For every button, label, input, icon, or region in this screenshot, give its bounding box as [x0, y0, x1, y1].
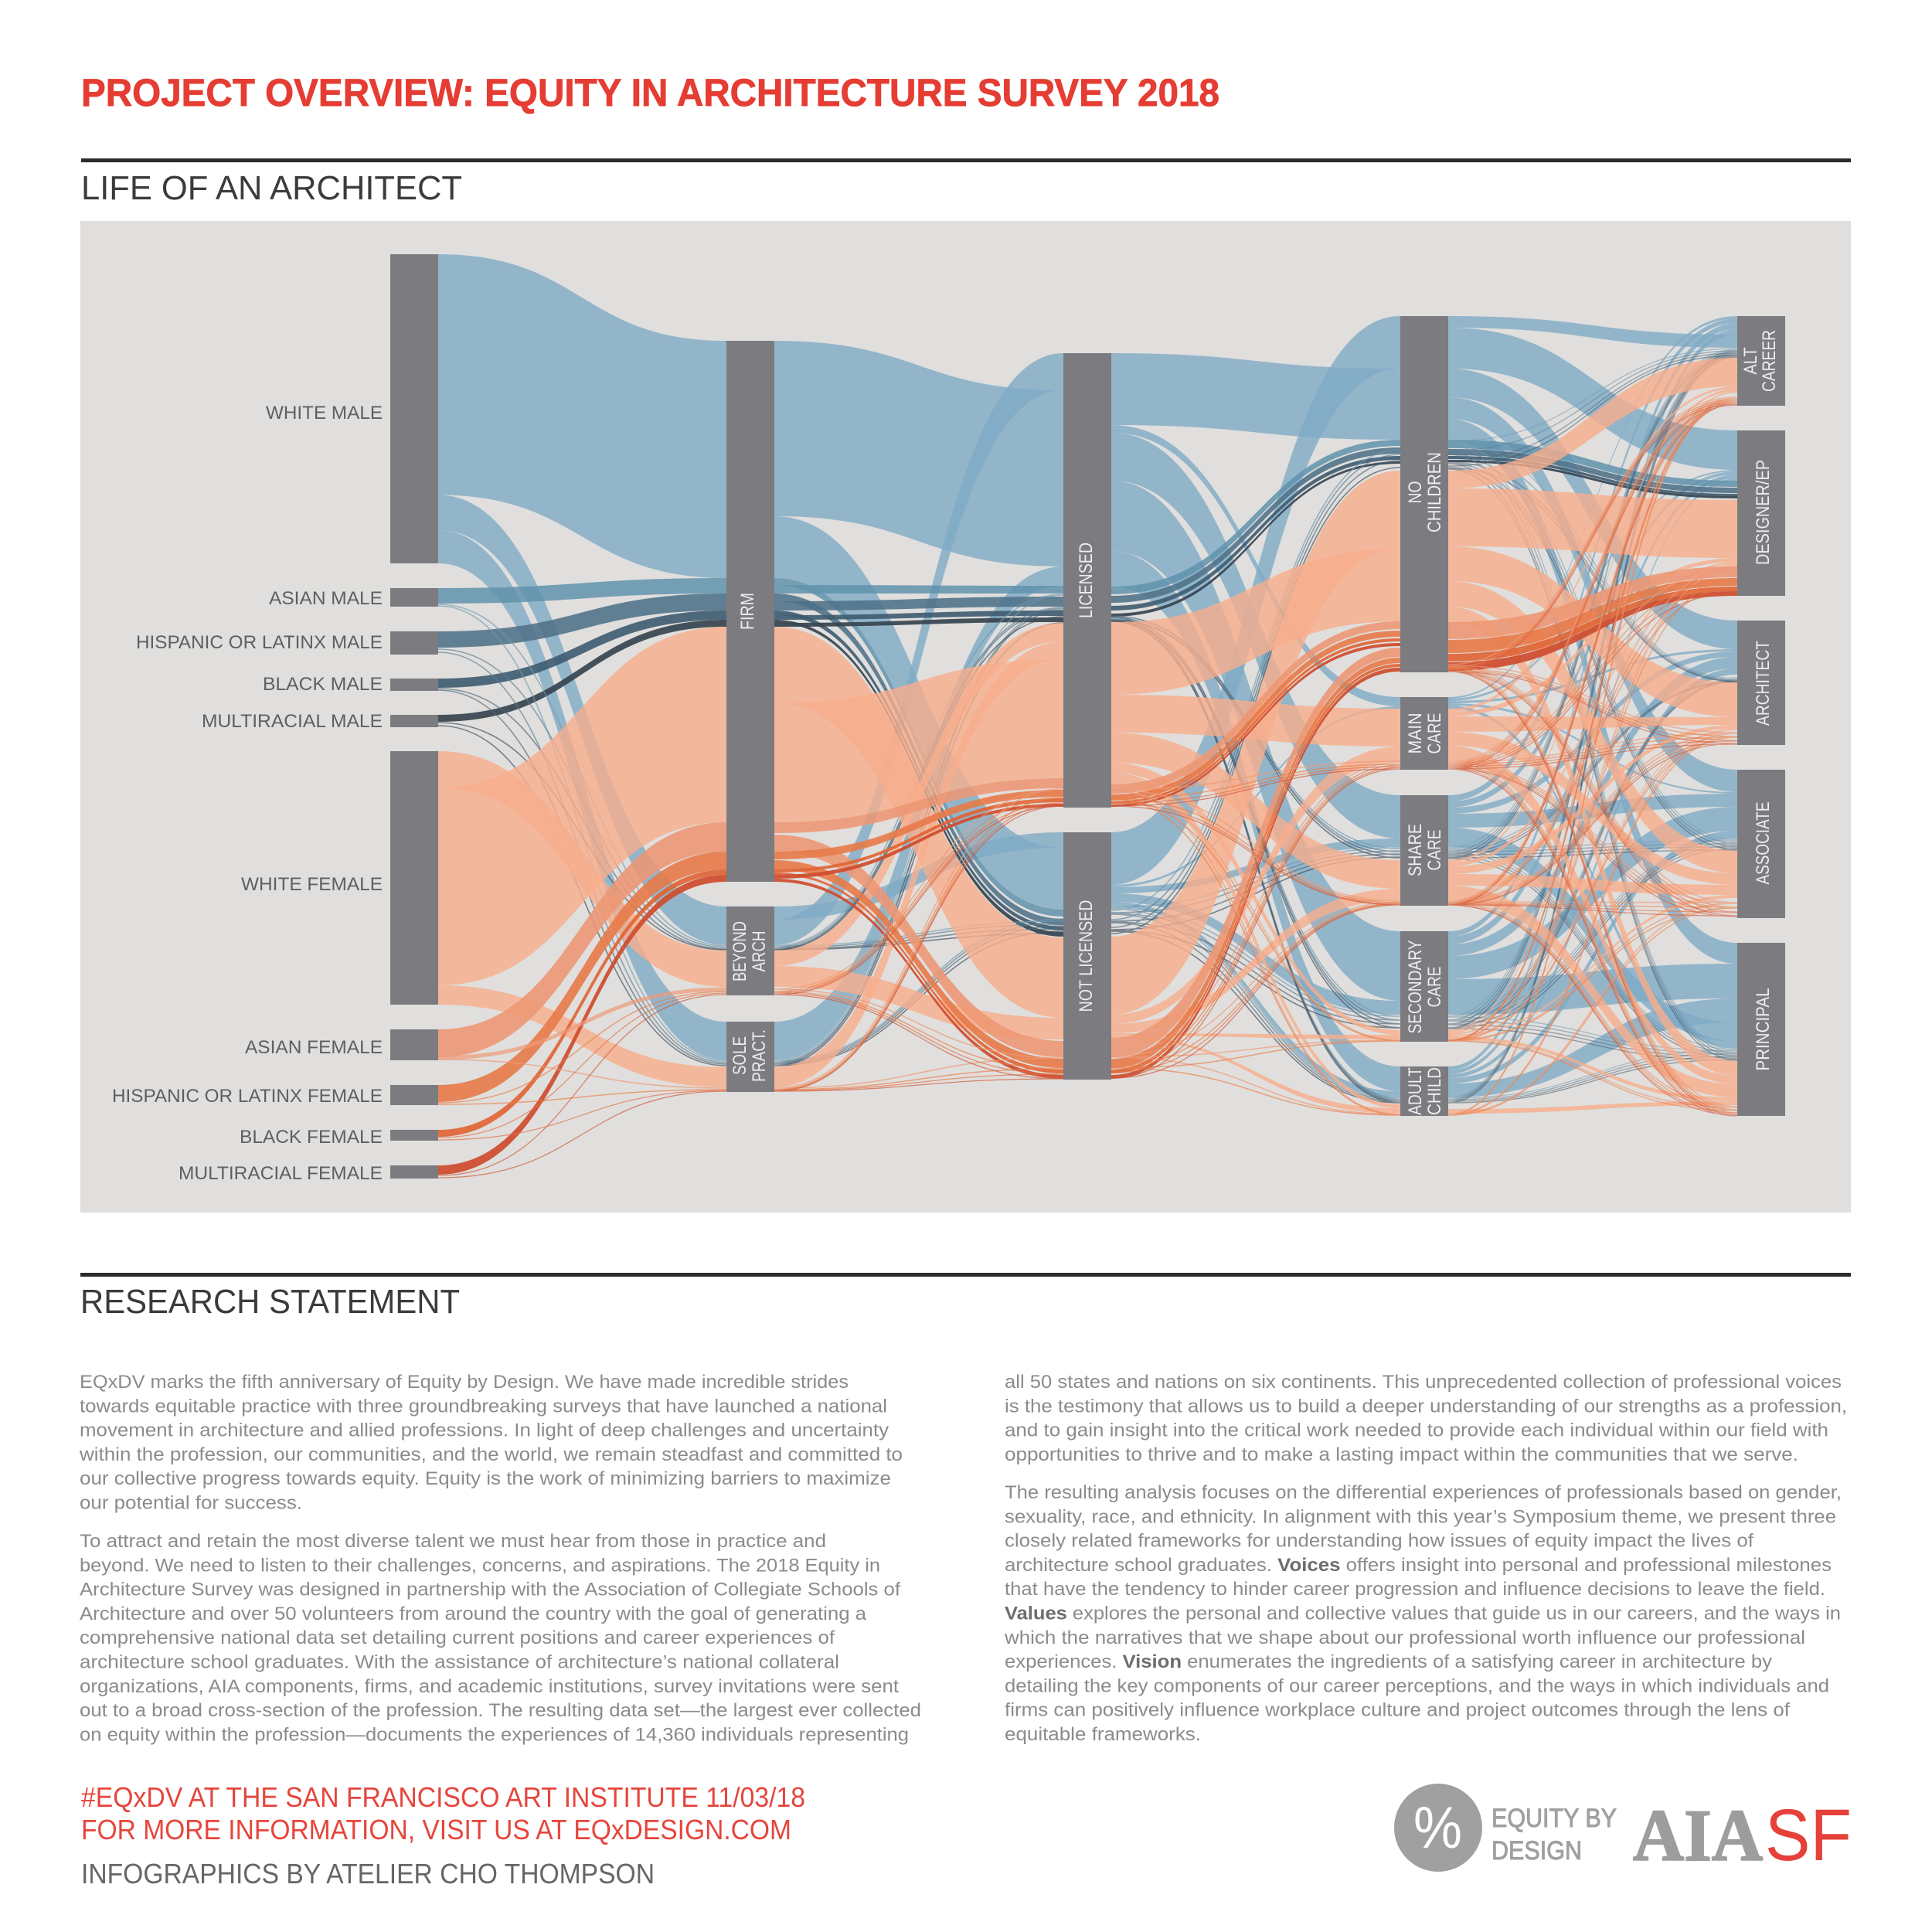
- text block: research statement, left column: within the profession, our communities, and the world, we remain steadfast and committed to: [79, 1444, 903, 1465]
- labels: race and gender: BLACK FEMALE: [240, 1127, 383, 1148]
- text block: research statement, right column: is the testimony that allows us to build a deeper understanding of our strengths as a profession,: [1005, 1396, 1847, 1417]
- text block: research statement, right column: Values explores the personal and collective values that guide us in our careers, and the ways in: [1005, 1603, 1841, 1624]
- labels: practice setting: [730, 593, 770, 1082]
- flows: white female (orange): [438, 358, 1737, 1114]
- text block: research statement, left column: towards equitable practice with three groundbreaking surveys that have launched a national: [80, 1396, 887, 1417]
- text block: research statement, left column: movement in architecture and allied professions. In light of deep challenges and uncertainty: [80, 1420, 889, 1441]
- text block: research statement, left column: Architecture and over 50 volunteers from around the country with the goal of generating a: [80, 1604, 867, 1624]
- nodes: caregiving: [1400, 316, 1448, 1116]
- logo: AIASF: SF: [1765, 1794, 1852, 1876]
- text block: research statement, right column: that have the tendency to hinder career progression and influence decisions to leave the field.: [1005, 1579, 1825, 1600]
- labels: race and gender: HISPANIC OR LATINX FEMALE: [112, 1086, 383, 1107]
- text block: research statement, right column: sexuality, race, and ethnicity. In alignment with this year’s Symposium theme, we present three: [1005, 1506, 1836, 1527]
- text block: research statement, right column: [1004, 1372, 1847, 1745]
- text block: research statement, left column: our collective progress towards equity. Equity is the work of minimizing barriers to maximize: [80, 1468, 891, 1489]
- logo: equity by design: %: [1413, 1795, 1462, 1861]
- title: PROJECT OVERVIEW: EQUITY IN ARCHITECTURE SURVEY 2018: [81, 71, 1219, 114]
- thin strands: male respondents to career outcomes: [1448, 349, 1737, 1103]
- logo: AIASF: [1633, 1794, 1852, 1876]
- footer: event information: #EQxDV AT THE SAN FRANCISCO ART INSTITUTE 11/03/18: [81, 1781, 805, 1813]
- text block: research statement, left column: [79, 1372, 921, 1745]
- labels: caregiving: SHARE: [1405, 824, 1426, 876]
- text block: research statement, left column: comprehensive national data set detailing current positions and career experiences of: [80, 1628, 835, 1648]
- logo: equity by design: [1394, 1784, 1617, 1872]
- labels: licensure: NOT LICENSED: [1076, 900, 1097, 1012]
- labels: practice setting: ARCH: [749, 930, 770, 972]
- flows: hispanic or latinx female: [438, 578, 1737, 1102]
- text block: research statement, right column: The resulting analysis focuses on the differential experiences of professionals based on gender,: [1005, 1482, 1842, 1503]
- labels: race and gender: MULTIRACIAL FEMALE: [179, 1163, 383, 1184]
- labels: race and gender: MULTIRACIAL MALE: [202, 711, 383, 732]
- heading: life of an architect: LIFE OF AN ARCHITECT: [81, 169, 462, 207]
- flows: asian female: [438, 566, 1737, 1057]
- labels: race and gender: BLACK MALE: [263, 674, 383, 695]
- text block: research statement, left column: beyond. We need to listen to their challenges, concerns, and aspirations. The 2018 Equity in: [80, 1555, 880, 1576]
- labels: caregiving: CARE: [1424, 830, 1445, 870]
- labels: caregiving: NO: [1405, 481, 1426, 504]
- flows: multiracial male: [438, 460, 1737, 937]
- flows: black female: [438, 587, 1737, 1137]
- labels: career position: CAREER: [1759, 330, 1780, 392]
- text block: research statement, right column: architecture school graduates. Voices offers insight into personal and professional milestones: [1005, 1555, 1832, 1576]
- labels: licensure: LICENSED: [1076, 543, 1097, 618]
- text block: research statement, right column: firms can positively influence workplace culture and project outcomes through the lens of: [1005, 1700, 1790, 1721]
- labels: practice setting: SOLE: [730, 1036, 750, 1075]
- flows: white male (blue): [438, 254, 1737, 1097]
- thin strands: female respondents, early career: [438, 761, 1400, 1178]
- nodes: career position: [1737, 316, 1785, 1116]
- text block: research statement, right column: which the narratives that we shape about our professional worth influence our professional: [1004, 1628, 1805, 1648]
- nodes: practice setting: [726, 341, 774, 1092]
- labels: race and gender: WHITE FEMALE: [241, 874, 383, 895]
- footer: credit: INFOGRAPHICS BY ATELIER CHO THOMPSON: [81, 1858, 655, 1889]
- text block: research statement, right column: closely related frameworks for understanding how issues of equity impact the lives of: [1005, 1531, 1753, 1552]
- labels: practice setting: PRACT.: [749, 1029, 770, 1082]
- labels: career position: DESIGNER/EP: [1753, 460, 1774, 565]
- text block: research statement, right column: all 50 states and nations on six continents. This unprecedented collection of professional voices: [1005, 1372, 1842, 1393]
- labels: practice setting: BEYOND: [730, 921, 750, 981]
- text block: research statement, left column: EQxDV marks the fifth anniversary of Equity by Design. We have made incredible strides: [80, 1372, 849, 1393]
- labels: race and gender: ASIAN MALE: [269, 588, 383, 609]
- labels: caregiving: ADULT: [1405, 1067, 1426, 1115]
- text block: research statement, left column: architecture school graduates. With the assistance of architecture’s national collateral: [80, 1652, 839, 1672]
- flows: asian male: [438, 440, 1737, 917]
- labels: caregiving: MAIN: [1405, 713, 1426, 754]
- sankey chart: life of an architect: [112, 254, 1785, 1184]
- labels: caregiving: CARE: [1424, 966, 1445, 1008]
- nodes: race and gender: [390, 254, 438, 1179]
- logo: AIASF: AIA: [1633, 1794, 1763, 1876]
- flows: black male: [438, 456, 1737, 930]
- labels: caregiving: CHILDREN: [1424, 452, 1445, 532]
- heading: research statement: RESEARCH STATEMENT: [80, 1283, 460, 1321]
- text block: research statement, right column: and to gain insight into the critical work needed to provide each individual within our field with: [1005, 1420, 1828, 1441]
- text block: research statement, left column: our potential for success.: [80, 1493, 302, 1513]
- thin strands: female respondents to career outcomes: [1448, 397, 1737, 1116]
- labels: race and gender: WHITE MALE: [266, 403, 383, 423]
- text block: research statement, left column: on equity within the profession—documents the experiences of 14,360 individuals representing: [80, 1724, 909, 1745]
- panel: sankey background: [80, 221, 1851, 1213]
- text block: research statement, right column: experiences. Vision enumerates the ingredients of a satisfying career in architecture by: [1005, 1651, 1772, 1672]
- footer: event information: FOR MORE INFORMATION, VISIT US AT EQxDESIGN.COM: [81, 1814, 791, 1845]
- labels: career position: PRINCIPAL: [1753, 988, 1774, 1071]
- text block: research statement, right column: detailing the key components of our career perceptions, and the ways in which individuals and: [1005, 1675, 1829, 1696]
- labels: caregiving: CHILD: [1424, 1067, 1445, 1115]
- logo: equity by design: DESIGN: [1492, 1836, 1582, 1866]
- text block: research statement, left column: organizations, AIA components, firms, and academic institutions, survey invitations were sent: [80, 1676, 899, 1697]
- labels: practice setting: FIRM: [737, 593, 758, 630]
- flows: multiracial female: [438, 591, 1737, 1175]
- text block: research statement, left column: To attract and retain the most diverse talent we must hear from those in practice and: [80, 1531, 826, 1552]
- labels: caregiving: CARE: [1424, 713, 1445, 754]
- logo: equity by design: EQUITY BY: [1492, 1804, 1617, 1833]
- labels: race and gender: ASIAN FEMALE: [245, 1037, 383, 1058]
- labels: race and gender: HISPANIC OR LATINX MALE: [136, 632, 383, 653]
- labels: caregiving: SECONDARY: [1405, 940, 1426, 1034]
- labels: caregiving: [1405, 452, 1445, 1115]
- footer: event information: [81, 1781, 805, 1845]
- labels: licensure: [1076, 543, 1097, 1012]
- text block: research statement, left column: Architecture Survey was designed in partnership with the Association of Collegiate Schools of: [80, 1580, 900, 1600]
- labels: career position: ALT: [1740, 347, 1761, 374]
- flows: hispanic or latinx male: [438, 447, 1737, 925]
- labels: career position: [1740, 330, 1780, 1071]
- text block: research statement, right column: opportunities to thrive and to make a lasting impact within the communities that we serve.: [1005, 1444, 1798, 1465]
- text block: research statement, left column: out to a broad cross-section of the profession. The resulting data set—the largest ever collected: [80, 1700, 921, 1721]
- nodes: licensure: [1063, 353, 1111, 1080]
- labels: race and gender: [112, 403, 383, 1184]
- labels: career position: ARCHITECT: [1753, 641, 1774, 726]
- thin strands: male respondents: [438, 450, 1400, 1103]
- text block: research statement, right column: equitable frameworks.: [1005, 1724, 1201, 1745]
- labels: career position: ASSOCIATE: [1753, 802, 1774, 884]
